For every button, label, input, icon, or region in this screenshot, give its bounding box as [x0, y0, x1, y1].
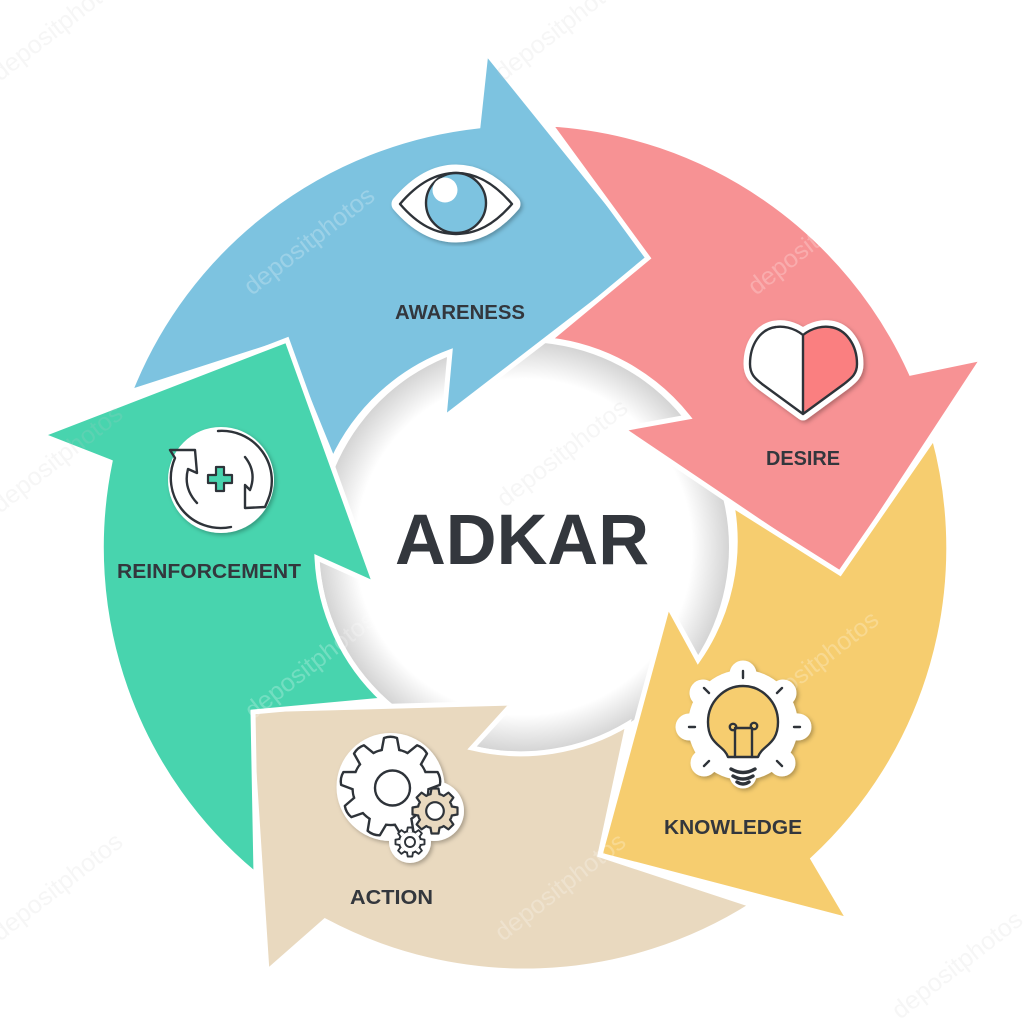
centre circle [319, 342, 729, 752]
watermarks: depositphotos [886, 905, 1024, 1024]
label: desire: DESIRE [766, 448, 840, 470]
segment: desire arrow [549, 124, 983, 576]
watermarks: depositphotos [491, 393, 633, 513]
big gear [339, 737, 442, 837]
watermarks: depositphotos [742, 181, 884, 301]
watermarks: depositphotos [489, 827, 631, 947]
small gear [396, 828, 424, 856]
icon: gears [336, 733, 464, 863]
watermarks: depositphotos [238, 181, 380, 301]
medium gear [412, 788, 458, 834]
segment: awareness arrow [130, 52, 652, 460]
label: awareness: AWARENESS [395, 302, 525, 324]
icon: reinforcement cycle [168, 427, 274, 533]
icon: eye [400, 173, 512, 234]
segment: reinforcement arrow [41, 340, 383, 875]
icon: light bulb [688, 670, 800, 784]
label: action: ACTION [350, 887, 433, 909]
icon: half heart [750, 327, 857, 414]
segment: action arrow [250, 703, 752, 972]
label: reinforcement: REINFORCEMENT [117, 561, 301, 583]
title: ADKAR [395, 501, 649, 580]
plus sign [208, 467, 232, 491]
label: knowledge: KNOWLEDGE [664, 817, 802, 839]
watermarks: depositphotos [239, 605, 381, 725]
watermarks: depositphotos [742, 605, 884, 725]
segment: knowledge arrow [600, 437, 949, 920]
